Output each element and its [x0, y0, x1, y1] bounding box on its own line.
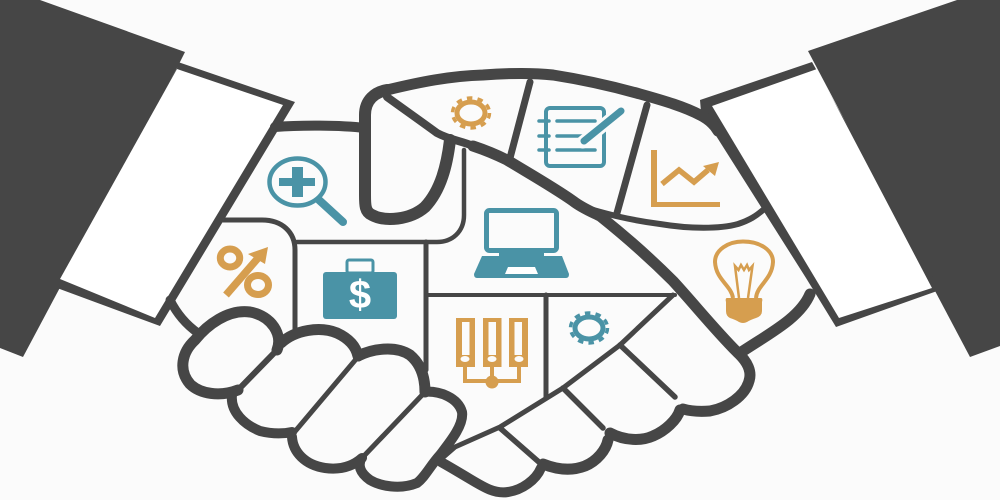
icon: notebook: [539, 108, 622, 166]
left thumb: [365, 90, 450, 219]
finger 1: [183, 312, 279, 394]
icon: briefcase: $: [349, 273, 371, 317]
right sleeve: [700, 0, 1000, 357]
icon: growth chart: [651, 150, 720, 207]
icon: percent arrow: [220, 247, 268, 295]
icon: orange gear: [452, 98, 490, 128]
left sleeve: [0, 0, 295, 357]
left fingers: [183, 312, 462, 487]
icon: binders network: [456, 318, 528, 388]
icon: laptop: [474, 210, 569, 278]
right hand outline: [387, 74, 810, 492]
icon: magnifier: [270, 158, 343, 222]
icon: light bulb: [715, 242, 773, 323]
hand panel dividers: [170, 82, 763, 463]
finger 3: [292, 349, 425, 469]
finger 4: [360, 392, 462, 487]
icon: teal gear: [570, 313, 608, 343]
icon: briefcase: [323, 260, 397, 319]
finger 2: [232, 330, 358, 435]
